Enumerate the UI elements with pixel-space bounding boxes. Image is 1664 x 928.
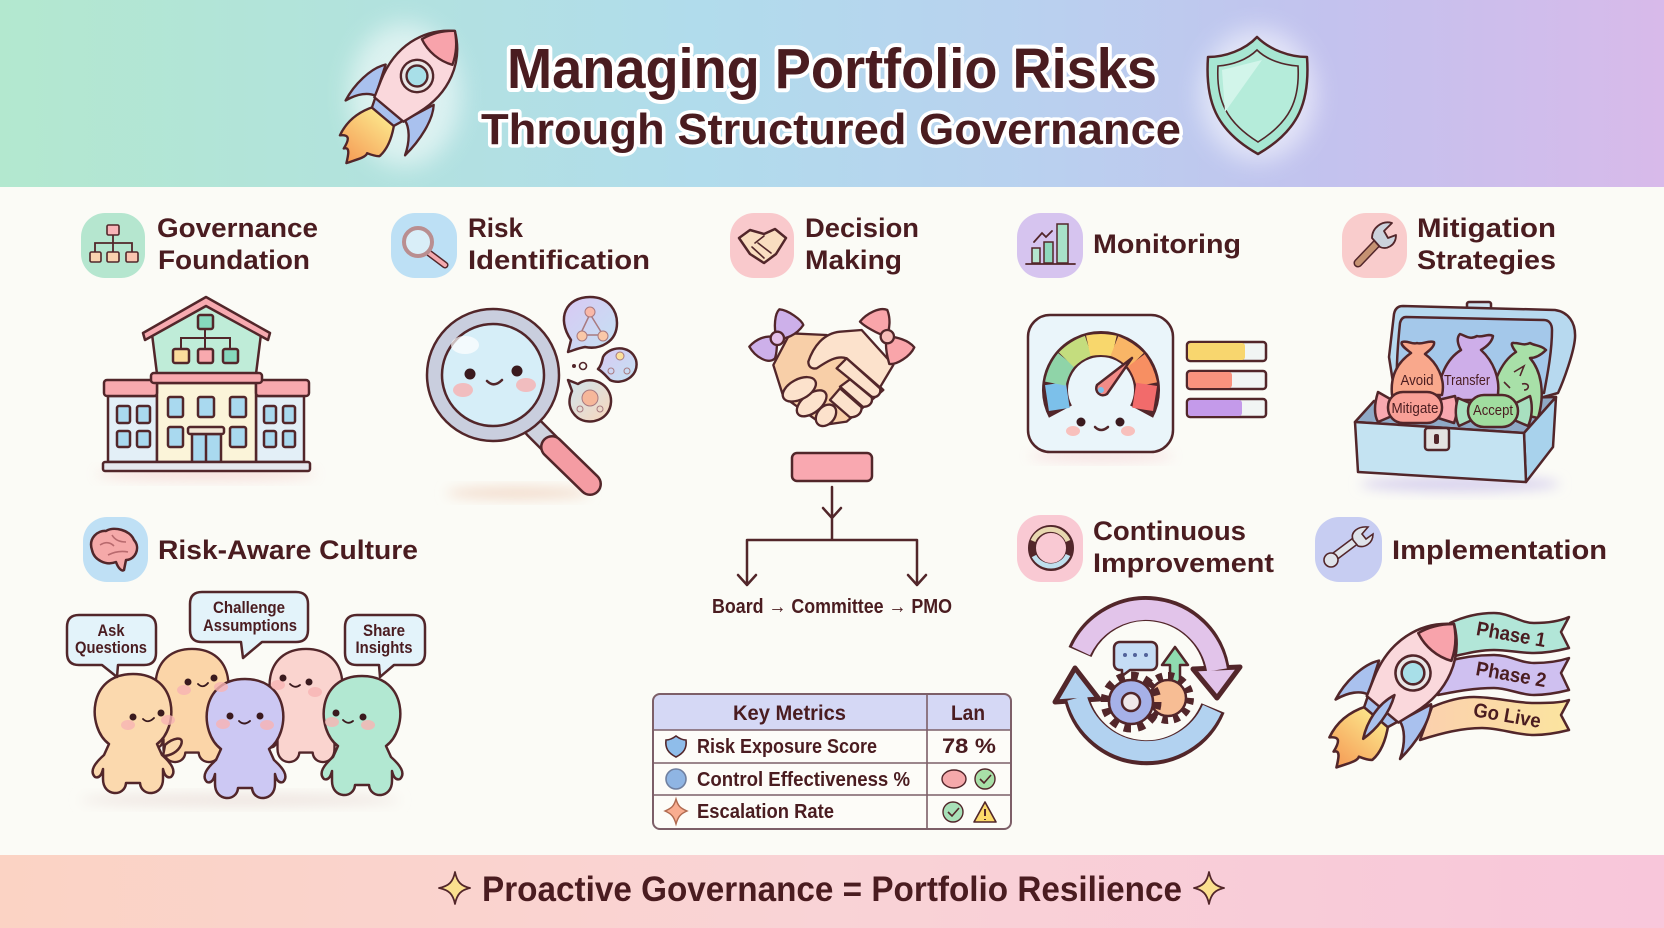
illustration: smiling magnifier [427, 297, 637, 499]
heading: Decision [805, 213, 919, 243]
candy: Mitigate [1375, 392, 1457, 423]
heading: Risk-Aware Culture [158, 535, 418, 565]
candy: retain sack [1492, 343, 1546, 418]
icon: green check [943, 802, 963, 822]
heading: Identification [468, 245, 650, 275]
illustration: toolbox with candies [1355, 302, 1575, 492]
heading: Monitoring [1093, 229, 1241, 259]
ribbon: Phase 2 [1438, 655, 1569, 695]
heading: Strategies [1417, 245, 1556, 275]
ribbon: Go Live: Go Live [1472, 699, 1542, 733]
panel: monitoring [1017, 213, 1266, 461]
header band [0, 0, 1664, 187]
speech bubble: Challenge Assumptions: Assumptions [203, 616, 297, 635]
icon: shield [666, 736, 686, 757]
speech bubble: Ask Questions: Ask [98, 621, 125, 640]
title: Through Structured Governance [481, 105, 1181, 154]
heading: Improvement [1093, 548, 1274, 578]
title: Managing Portfolio Risks [507, 37, 1157, 101]
ribbon: Phase 1 [1450, 613, 1569, 657]
icon: magnifier badge [391, 213, 457, 278]
panel: risk identification [391, 213, 650, 499]
green arrow [1162, 647, 1188, 684]
icon: header shield [1200, 29, 1316, 161]
candy: Accept: Accept [1473, 403, 1513, 419]
org box [792, 453, 872, 481]
heading: Mitigation [1417, 213, 1556, 243]
icon: wrench badge [1342, 213, 1407, 278]
candy: Transfer: Transfer [1444, 372, 1490, 389]
illustration: launch rocket [1301, 596, 1489, 796]
heading: Governance [157, 213, 318, 243]
illustration: improvement cycle [1055, 609, 1240, 753]
candy: Avoid: Avoid [1400, 372, 1434, 389]
speech bubble: Ask Questions [67, 615, 156, 677]
icon: pink brain [942, 770, 966, 788]
candy: Mitigate: Mitigate [1392, 401, 1438, 417]
icon: spanner badge [1315, 517, 1382, 582]
heading: Making [805, 245, 902, 275]
heading: Implementation [1392, 535, 1607, 565]
panel: mitigation strategies [1342, 213, 1575, 492]
speech bubble: Share Insights [345, 615, 425, 677]
panel: governance foundation [81, 213, 318, 480]
heading: Continuous [1093, 516, 1246, 546]
candy: Accept [1456, 395, 1532, 427]
panel: continuous improvement [1017, 515, 1274, 753]
icon: cycle badge [1017, 515, 1083, 582]
speech bubble: Challenge Assumptions: Challenge [213, 598, 285, 617]
footer band [0, 855, 1664, 928]
reporting chain: Board → Committee → PMO [712, 596, 952, 618]
illustration: gauge [1028, 315, 1173, 461]
ribbon: Phase 1: Phase 1 [1475, 618, 1547, 652]
chat bubble [1114, 642, 1157, 676]
panel: implementation [1301, 517, 1607, 796]
table text: Risk Exposure Score [697, 736, 877, 758]
icon: org chart badge [81, 213, 145, 278]
bubbles [564, 297, 637, 421]
table text: Escalation Rate [697, 801, 834, 823]
table text: Lan [951, 702, 985, 725]
icon: warning [974, 802, 996, 822]
icon: header rocket [314, 5, 487, 189]
bars [1187, 342, 1266, 417]
candy: Transfer [1439, 334, 1498, 400]
illustration: team characters [80, 649, 402, 806]
tagline: Proactive Governance = Portfolio Resilience [482, 870, 1182, 909]
ribbon: Phase 2: Phase 2 [1474, 658, 1548, 692]
icon: green check [975, 769, 995, 789]
table text: 78 % [942, 735, 996, 758]
toolbox front [1524, 397, 1556, 482]
table text: Key Metrics [733, 702, 846, 725]
icon: chart badge [1017, 213, 1083, 278]
speech bubble: Share Insights: Share [363, 621, 405, 640]
table text [697, 702, 996, 823]
heading: Foundation [158, 245, 310, 275]
illustration: handshake with bows [749, 309, 914, 430]
icon: brain badge [83, 517, 148, 582]
panel: key metrics table [653, 694, 1011, 829]
icon: right sparkle [1194, 872, 1224, 904]
ribbon: Go Live [1420, 697, 1569, 740]
candy: Avoid [1392, 342, 1443, 395]
heading: Risk [468, 213, 524, 243]
illustration: building [96, 297, 316, 480]
footer message [439, 870, 1224, 909]
table text: Control Effectiveness % [697, 769, 910, 791]
icon: escalation star [665, 799, 687, 824]
speech bubble: Challenge Assumptions [190, 592, 308, 658]
gears [1105, 676, 1190, 728]
speech bubble: Share Insights: Insights [356, 638, 412, 657]
icon: left sparkle [439, 872, 470, 904]
icon: handshake badge [730, 213, 794, 278]
panel: risk-aware culture [67, 517, 425, 806]
icon: control circle [666, 769, 686, 789]
speech bubble: Ask Questions: Questions [75, 638, 147, 657]
title [481, 37, 1181, 154]
arrows: reporting line [738, 487, 926, 585]
panel: decision making [712, 213, 952, 618]
